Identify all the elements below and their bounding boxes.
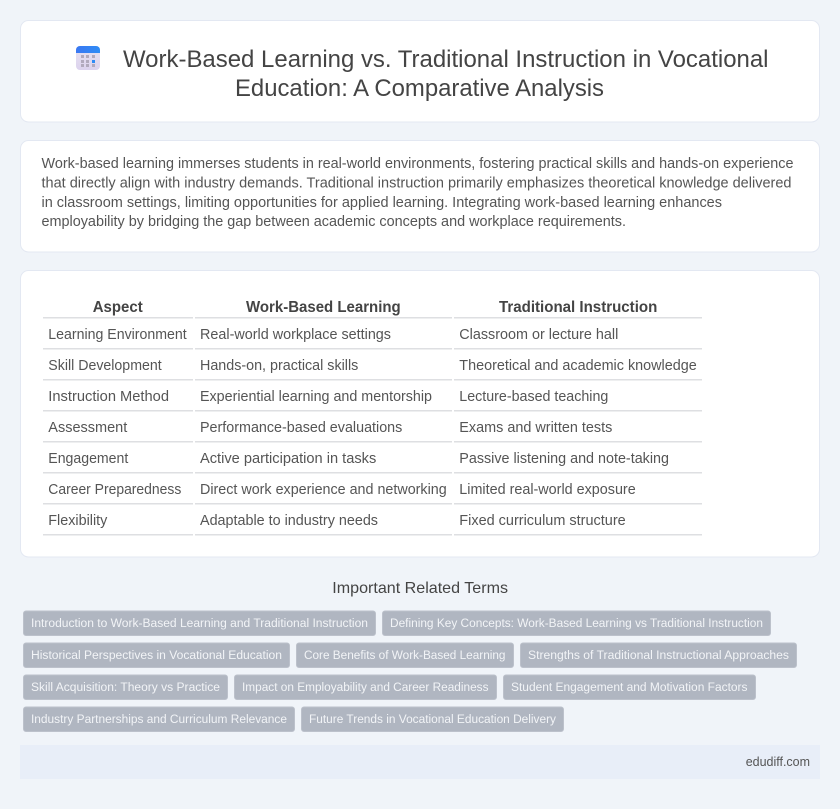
text block: introduction paragraph: that directly align with industry demands. Traditional instruction primarily emphasizes theoretical knowledge delivered [42, 176, 791, 192]
panel: title header [20, 20, 820, 122]
tag: defining key concepts: Defining Key Concepts: Work-Based Learning vs Traditional Instruction [390, 616, 763, 630]
table row: flexibility: Adaptable to industry needs [200, 513, 378, 529]
table row: skill development: Theoretical and academic knowledge [459, 358, 697, 374]
table row: career preparedness: Limited real-world exposure [459, 482, 636, 498]
tag: strengths [520, 643, 796, 668]
tag: core benefits [296, 643, 514, 668]
table row: learning environment: Learning Environment [48, 327, 187, 343]
table row: assessment: Exams and written tests [459, 420, 612, 436]
table row: assessment [48, 420, 612, 436]
footer text: edudiff.com: edudiff.com [746, 754, 810, 769]
tag: strengths: Strengths of Traditional Instructional Approaches [528, 648, 789, 662]
table row: learning environment [48, 327, 618, 343]
table row lines [43, 317, 702, 536]
table row: assessment: Assessment [48, 420, 127, 436]
tag: future trends: Future Trends in Vocational Education Delivery [309, 712, 557, 726]
title: Education: A Comparative Analysis [235, 75, 604, 102]
table row: skill development: Skill Development [48, 358, 162, 374]
tag: industry partnerships: Industry Partnerships and Curriculum Relevance [31, 712, 287, 726]
table row: engagement [48, 451, 669, 467]
related terms tags [24, 611, 796, 732]
table row: skill development: Hands-on, practical skills [200, 358, 358, 374]
table row: instruction method: Instruction Method [48, 389, 169, 405]
tag: impact on employability: Impact on Employability and Career Readiness [242, 680, 488, 694]
table row: career preparedness: Direct work experience and networking [200, 482, 447, 498]
footer [20, 745, 820, 779]
text block: introduction paragraph: Work-based learning immerses students in real-world environments, fostering practical skills and hands-on experience [42, 156, 794, 172]
tag: future trends [302, 707, 564, 732]
heading: important related terms: Important Related Terms [332, 580, 508, 597]
tag: introduction: Introduction to Work-Based Learning and Traditional Instruction [31, 616, 368, 630]
table row: instruction method [48, 389, 608, 405]
table row: flexibility: Flexibility [48, 513, 108, 529]
table header row: Traditional Instruction [499, 299, 657, 316]
table row: career preparedness [48, 482, 636, 498]
tag: skill acquisition [24, 675, 228, 700]
tag: impact on employability [234, 675, 496, 700]
table header row [93, 299, 657, 316]
table row: instruction method: Experiential learning and mentorship [200, 389, 432, 405]
tag: introduction [24, 611, 376, 636]
tag: skill acquisition: Skill Acquisition: Theory vs Practice [31, 680, 220, 694]
table header row: Aspect [93, 299, 143, 316]
tag: historical perspectives [24, 643, 290, 668]
table row: skill development [48, 358, 697, 374]
icon: calendar [76, 46, 100, 70]
table row: assessment: Performance-based evaluations [200, 420, 402, 436]
table row: career preparedness: Career Preparedness [48, 482, 181, 498]
table row: flexibility: Fixed curriculum structure [459, 513, 626, 529]
table row: engagement: Passive listening and note-taking [459, 451, 669, 467]
tag: historical perspectives: Historical Perspectives in Vocational Education [31, 648, 282, 662]
tag: core benefits: Core Benefits of Work-Based Learning [304, 648, 506, 662]
table row: engagement: Active participation in tasks [200, 451, 376, 467]
tag: student engagement: Student Engagement and Motivation Factors [511, 680, 748, 694]
title [123, 46, 768, 102]
title: Work-Based Learning vs. Traditional Instruction in Vocational [123, 46, 768, 73]
panel: introduction [20, 140, 820, 252]
text block: introduction paragraph [42, 156, 794, 230]
table row: learning environment: Real-world workplace settings [200, 327, 391, 343]
text block: introduction paragraph: employability by bridging the gap between academic concepts and workplace requirements. [42, 214, 626, 230]
table row: flexibility [48, 513, 626, 529]
table row: engagement: Engagement [48, 451, 128, 467]
tag: defining key concepts [382, 611, 770, 636]
tag: student engagement [504, 675, 756, 700]
table header row: Work-Based Learning [246, 299, 401, 316]
text block: introduction paragraph: in classroom settings, limiting opportunities for applied learning. Integrating work-based learning enhances [42, 195, 722, 211]
tag: industry partnerships [24, 707, 294, 732]
table row: instruction method: Lecture-based teaching [459, 389, 608, 405]
table row: learning environment: Classroom or lecture hall [459, 327, 618, 343]
panel: comparison table [20, 270, 820, 557]
